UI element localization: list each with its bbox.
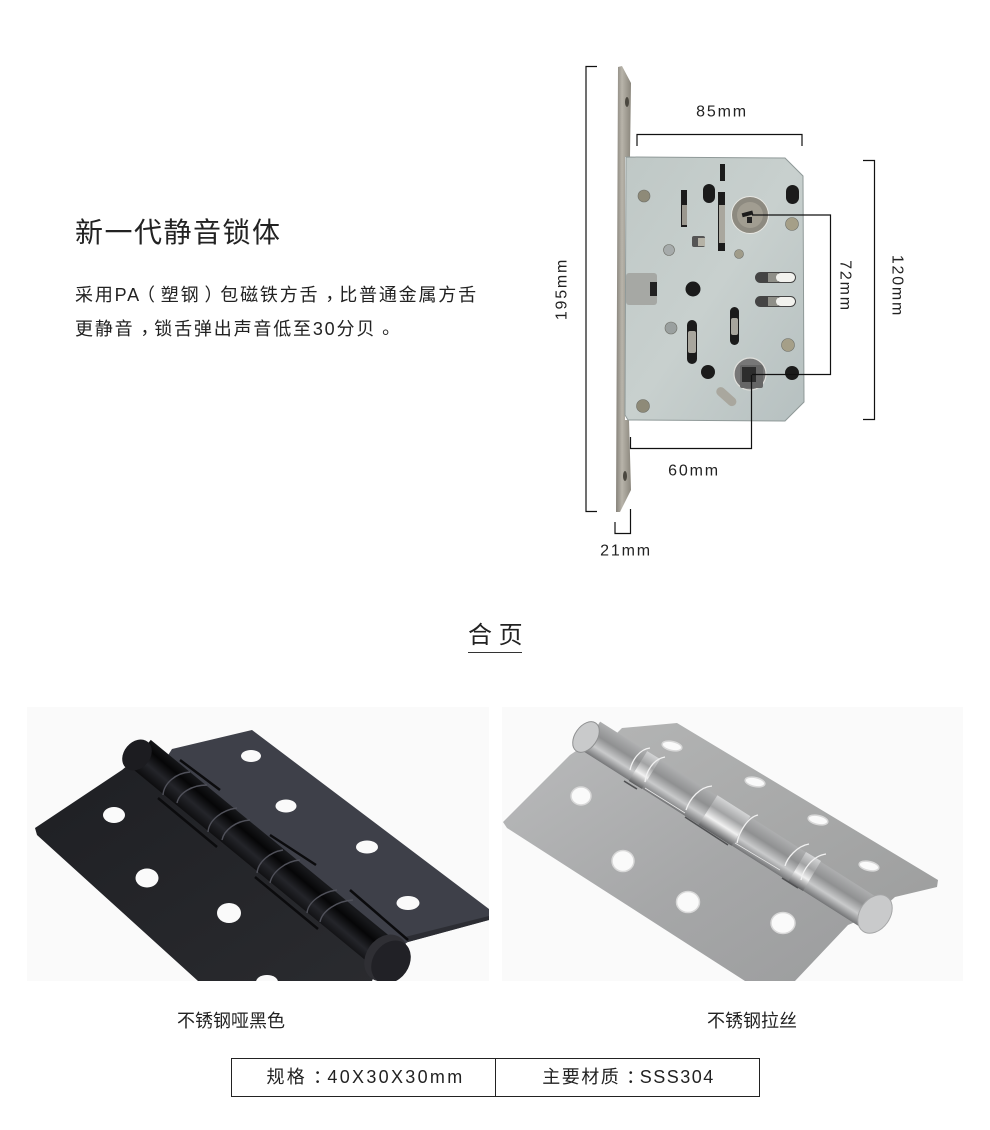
end caps — [116, 734, 419, 991]
knuckle sections — [638, 766, 812, 876]
barrel — [140, 753, 381, 951]
barrel — [591, 736, 873, 915]
spec table — [231, 1058, 760, 1097]
lock case — [625, 157, 804, 421]
cell: size: 规格 ：40X30X30mm — [266, 1067, 464, 1087]
dimension labels: 120mm — [888, 255, 906, 317]
knuckle notches — [158, 760, 408, 940]
knuckle joints — [630, 748, 826, 880]
screws and rivets — [636, 190, 798, 412]
follower spindle — [734, 358, 766, 390]
right leaf — [610, 723, 938, 915]
heading: silent lock body: 新一代静音锁体 — [75, 217, 282, 248]
knuckle shadows — [624, 781, 798, 888]
knuckle joints — [163, 772, 353, 922]
end caps — [567, 717, 899, 940]
left leaf — [503, 745, 860, 981]
caption: brushed hinge: 不锈钢拉丝 — [707, 1011, 797, 1031]
caption: black hinge: 不锈钢哑黑色 — [177, 1011, 285, 1031]
dimension labels: 72mm — [836, 260, 854, 312]
cylinder spindle — [732, 196, 768, 234]
text block: lock description — [75, 284, 478, 338]
dimension labels: 195mm — [554, 258, 570, 320]
photo: brushed steel hinge — [502, 707, 963, 981]
dimension labels: 85mm — [696, 104, 748, 120]
latch opening — [626, 273, 657, 305]
screw holes — [103, 750, 420, 989]
slot inserts — [682, 205, 795, 408]
screw holes — [571, 740, 880, 934]
text block: lock description: 采用PA（塑钢）包磁铁方舌 ，比普通金属方舌 — [75, 284, 478, 304]
dimension labels: 21mm — [600, 542, 652, 560]
cell: material: 主要材质 ：SSS304 — [542, 1067, 715, 1087]
photo: black hinge — [27, 707, 489, 981]
cell: size — [232, 1059, 496, 1096]
dimension lines — [586, 66, 874, 534]
section title: hinge: 合 页 — [468, 622, 523, 649]
right leaf — [165, 730, 489, 950]
left leaf — [35, 755, 385, 981]
faceplate — [616, 66, 631, 512]
slots and holes — [681, 164, 799, 380]
dimension labels — [554, 104, 906, 560]
diagram: lock body with dimensions — [554, 66, 906, 560]
text block: lock description: 更静音 ，锁舌弹出声音低至30分贝 。 — [75, 318, 402, 338]
dimension labels: 60mm — [668, 462, 720, 480]
